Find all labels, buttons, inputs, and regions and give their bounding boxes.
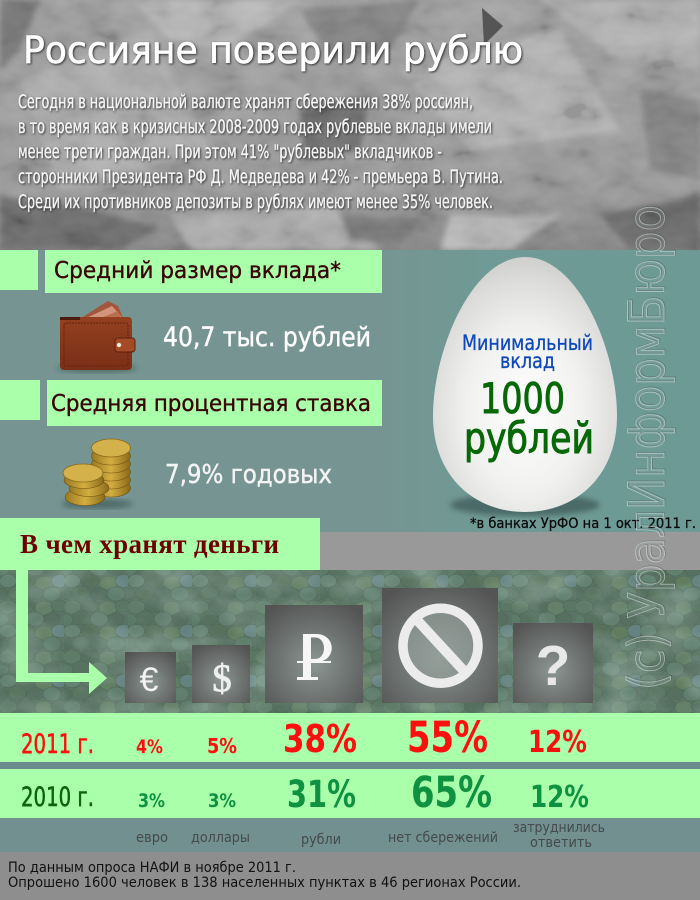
egg: minimum deposit: рублей (464, 414, 594, 464)
row: 2011: 38% (283, 717, 357, 761)
value: average rate: 7,9% годовых (165, 460, 332, 490)
sliver between rows (0, 762, 700, 769)
row: 2011 (0, 713, 700, 763)
row: 2011: 55% (407, 713, 488, 763)
row: 2010: 2010 г. (21, 782, 94, 813)
intro text block: Сегодня в национальной валюте хранят сбережения 38% россиян, (18, 92, 473, 113)
row: 2011: 5% (207, 734, 237, 758)
panel: coins background (0, 570, 700, 714)
icon: wallet (57, 301, 137, 373)
category labels: ответить (530, 835, 592, 851)
watermark: (с) УралИнформБюро (619, 204, 677, 689)
heading: average rate: Средняя процентная ставка (51, 391, 371, 417)
icon: no savings (382, 588, 498, 703)
category labels: нет сбережений (388, 830, 498, 846)
heading: average deposit (45, 250, 382, 293)
heading: where money is kept: В чем хранят деньги (20, 529, 279, 559)
egg: minimum deposit: Минимальный (462, 331, 593, 355)
title: Россияне поверили рублю (23, 29, 523, 72)
icon: dollar (192, 645, 250, 703)
intro text block: Среди их противников депозиты в рублях имеют менее 35% человек. (18, 192, 493, 213)
intro text block: сторонники Президента РФ Д. Медведева и 42% - премьера В. Путина. (18, 167, 503, 188)
category labels: евро (136, 830, 168, 846)
icon: euro (125, 652, 176, 703)
panel: gray band (320, 532, 700, 571)
green tab: average rate (0, 380, 40, 420)
row: 2010: 31% (287, 773, 356, 816)
icon: question (513, 623, 593, 703)
heading: average deposit: Средний размер вклада* (54, 258, 341, 284)
icon: euro: € (140, 661, 159, 699)
source note (0, 852, 700, 900)
green tab: average deposit (0, 250, 38, 290)
panel: banknote header background (0, 0, 700, 250)
icon: gold coins (61, 439, 133, 509)
arrow (16, 570, 107, 694)
egg: minimum deposit: вклад (500, 349, 555, 373)
category labels: доллары (191, 830, 250, 846)
egg: minimum deposit (433, 257, 617, 516)
footnote: *в банках УрФО на 1 окт. 2011 г. (470, 516, 696, 532)
row: 2011: 2011 г. (21, 729, 94, 760)
row: 2010: 3% (208, 790, 236, 812)
heading: where money is kept (0, 518, 320, 570)
intro text block: в то время как в кризисных 2008-2009 годах рублевые вклады имели (18, 117, 492, 138)
row: 2010 (0, 768, 700, 818)
watermark: (с) УралИнформБюро (618, 205, 676, 690)
row: 2010: 12% (530, 780, 589, 815)
egg: minimum deposit: 1000 (480, 374, 565, 423)
row: 2010: 3% (138, 790, 165, 812)
category labels (0, 818, 700, 852)
source note: Опрошено 1600 человек в 138 населенных пунктах в 46 регионах России. (8, 875, 521, 891)
row: 2010: 65% (411, 768, 492, 818)
heading: average rate (47, 380, 382, 426)
category labels: рубли (301, 832, 341, 848)
icon: ruble (265, 605, 363, 703)
panel: teal deposit section (0, 250, 700, 532)
row: 2011: 12% (528, 725, 587, 760)
icon: dollar: $ (212, 657, 232, 700)
row: 2011: 4% (136, 736, 163, 758)
intro text block: менее трети граждан. При этом 41% "рублевых" вкладчиков - (18, 142, 442, 163)
source note: По данным опроса НАФИ в ноябре 2011 г. (8, 860, 296, 876)
value: average deposit: 40,7 тыс. рублей (163, 322, 371, 353)
category labels: затруднились (513, 820, 605, 836)
icon: question: ? (536, 634, 570, 698)
intro text block (18, 92, 503, 213)
